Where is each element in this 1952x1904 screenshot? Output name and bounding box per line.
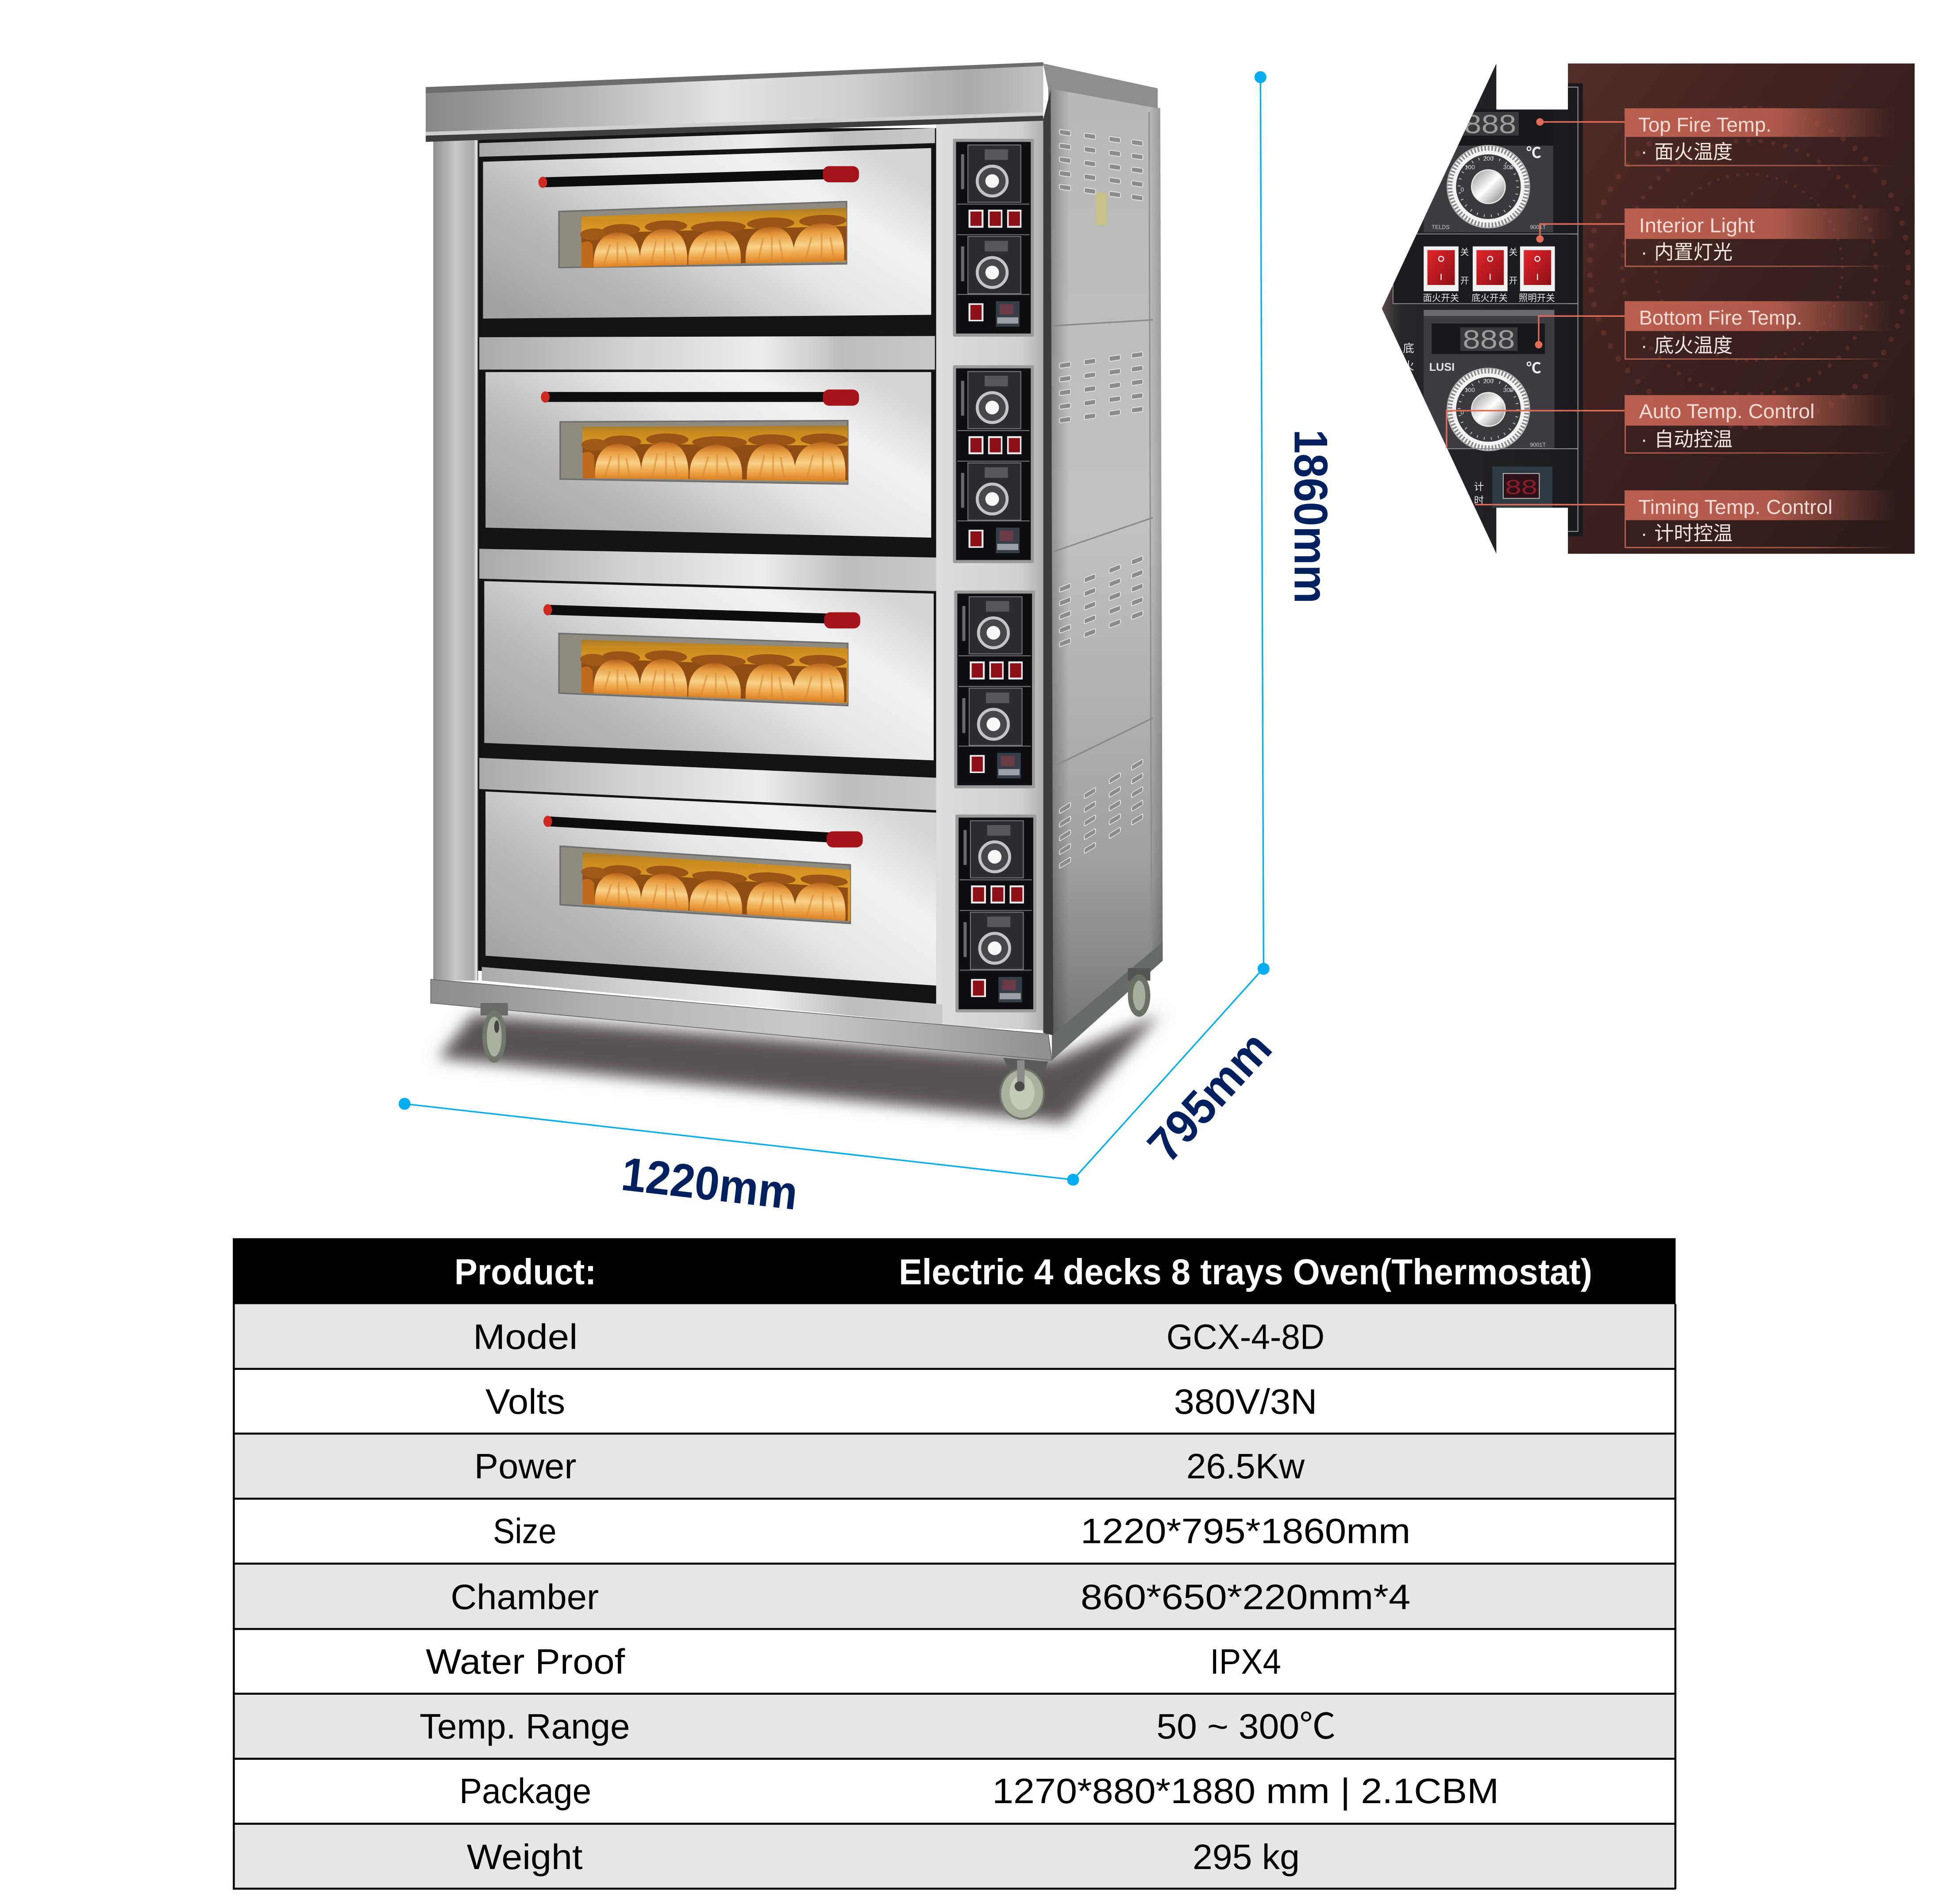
- callout: interior light: [1625, 208, 1892, 266]
- callout: bottom fire temp: [1625, 301, 1892, 359]
- callout: interior light: ·: [1641, 242, 1647, 263]
- callout: interior light: Interior Light: [1639, 214, 1755, 237]
- table header: [233, 1238, 1675, 1304]
- callout leader lines: [1447, 122, 1625, 504]
- top thermostat plate: 9001T: [1530, 224, 1546, 230]
- callout: top fire temp: 面火温度: [1654, 142, 1733, 163]
- switch row: 开: [1509, 276, 1517, 286]
- callout: top fire temp: ·: [1641, 141, 1647, 162]
- callout: timing temp control: 计时控温: [1654, 523, 1733, 545]
- row: volts: Volts: [485, 1381, 565, 1421]
- callout: timing temp control: Timing Temp. Control: [1638, 496, 1833, 519]
- dimension label: width: 1220mm: [619, 1147, 801, 1220]
- switch row: 照明开关: [1519, 293, 1555, 304]
- panel background: [1568, 63, 1915, 554]
- left pillar: [433, 139, 478, 981]
- row: volts: [485, 1381, 1317, 1421]
- callout: timing temp control: [1625, 490, 1892, 547]
- table rows backgrounds: [233, 1304, 1675, 1889]
- row: package: Package: [459, 1771, 591, 1811]
- caster back right: [1128, 968, 1150, 1017]
- row: water proof: IPX4: [1210, 1642, 1281, 1681]
- callout: auto temp control: 自动控温: [1654, 429, 1733, 450]
- dimension label: height: 1860mm: [1285, 429, 1338, 604]
- control close-up: [1382, 63, 1577, 554]
- oven product illustration: [426, 62, 1163, 1123]
- row: power: [474, 1446, 1305, 1486]
- specification table: [233, 1238, 1675, 1889]
- row: weight: 295 kg: [1193, 1837, 1300, 1877]
- callout: auto temp control: Auto Temp. Control: [1639, 400, 1814, 423]
- callout: auto temp control: [1625, 395, 1892, 453]
- control detail panel: [1382, 63, 1915, 554]
- switch row: 关: [1509, 248, 1517, 258]
- base shelf: [431, 979, 1052, 1060]
- deck 1: [483, 148, 931, 319]
- row: model: [473, 1317, 1324, 1357]
- deck 3: [484, 581, 934, 760]
- row: chamber: [450, 1577, 1410, 1616]
- switch row: 底火开关: [1471, 293, 1508, 304]
- lintels: [479, 128, 943, 1024]
- table header: Product:: [454, 1252, 596, 1292]
- row: package: 1270*880*1880 mm | 2.1CBM: [992, 1771, 1499, 1811]
- callout dots: [1535, 118, 1544, 348]
- oven body back: [478, 128, 936, 1008]
- bottom thermostat plate: 888: [1463, 325, 1515, 354]
- row: weight: [467, 1837, 1300, 1877]
- row: model: Model: [473, 1317, 578, 1357]
- table header: Electric 4 decks 8 trays Oven(Thermostat): [899, 1252, 1592, 1292]
- timer: 计: [1474, 481, 1484, 492]
- dimension lines: [399, 71, 1270, 1186]
- row: size: Size: [493, 1511, 556, 1550]
- bottom thermostat plate: LUSI: [1429, 361, 1455, 373]
- row: size: 1220*795*1860mm: [1081, 1511, 1410, 1550]
- callout: interior light: 内置灯光: [1654, 242, 1733, 263]
- row: chamber: Chamber: [450, 1577, 599, 1616]
- row: temperature range: Temp. Range: [420, 1706, 630, 1746]
- deck 4: [485, 792, 936, 985]
- callout: bottom fire temp: 底火温度: [1654, 335, 1733, 357]
- switch row: [1393, 234, 1577, 304]
- row: volts: 380V/3N: [1174, 1381, 1317, 1421]
- switch row: 关: [1460, 248, 1469, 258]
- panel frame: [1568, 83, 1583, 536]
- top cap: [426, 62, 1043, 142]
- switch row: 开: [1460, 276, 1469, 286]
- table grid: [233, 1304, 1675, 1889]
- control panel deck 3: [954, 590, 1035, 789]
- row: power: Power: [474, 1446, 576, 1486]
- row: temperature range: 50 ~ 300℃: [1156, 1706, 1336, 1746]
- row: package: [459, 1771, 1499, 1811]
- row: water proof: [426, 1642, 1281, 1681]
- row: chamber: 860*650*220mm*4: [1081, 1577, 1410, 1616]
- bottom thermostat plate: 底: [1403, 342, 1414, 355]
- callout: bottom fire temp: ·: [1641, 335, 1647, 357]
- deck 2: [485, 372, 931, 538]
- row: weight: Weight: [467, 1837, 583, 1877]
- timer: [1474, 467, 1552, 508]
- row: size: [493, 1511, 1410, 1550]
- switch row: 面火开关: [1423, 293, 1459, 304]
- row: power: 26.5Kw: [1186, 1446, 1305, 1486]
- dimension label: depth: 795mm: [1137, 1021, 1282, 1172]
- bottom thermostat plate: ℃: [1526, 360, 1541, 377]
- bottom thermostat plate: 9001T: [1530, 442, 1546, 448]
- caster back left: [481, 1003, 508, 1063]
- top thermostat plate: 888: [1464, 110, 1516, 139]
- top thermostat plate: [1424, 109, 1553, 232]
- oven side face: [1043, 63, 1163, 1060]
- control panel deck 2: [953, 365, 1034, 563]
- floor shadow: [438, 1014, 1160, 1123]
- bottom thermostat plate: [1403, 310, 1554, 450]
- callout: timing temp control: ·: [1641, 523, 1647, 545]
- top thermostat plate: ℃: [1526, 145, 1541, 162]
- callout: top fire temp: Top Fire Temp.: [1638, 114, 1771, 136]
- callout: bottom fire temp: Bottom Fire Temp.: [1639, 306, 1802, 329]
- caster front right: [1000, 1058, 1048, 1119]
- row: model: GCX-4-8D: [1167, 1317, 1324, 1357]
- timer: 时: [1474, 495, 1484, 506]
- row: water proof: Water Proof: [426, 1642, 625, 1681]
- dotted arcs: [1590, 108, 1909, 427]
- callout: top fire temp: [1625, 108, 1892, 165]
- top thermostat plate: TELDS: [1432, 224, 1450, 230]
- row: temperature range: [420, 1706, 1336, 1746]
- control panel deck 1: [953, 139, 1034, 337]
- bottom thermostat plate: 火: [1403, 360, 1414, 372]
- right control column: [936, 89, 1053, 1035]
- control panel deck 4: [955, 815, 1036, 1012]
- callout: auto temp control: ·: [1641, 429, 1647, 450]
- timer: 88: [1505, 476, 1537, 499]
- side vents: [1059, 129, 1143, 869]
